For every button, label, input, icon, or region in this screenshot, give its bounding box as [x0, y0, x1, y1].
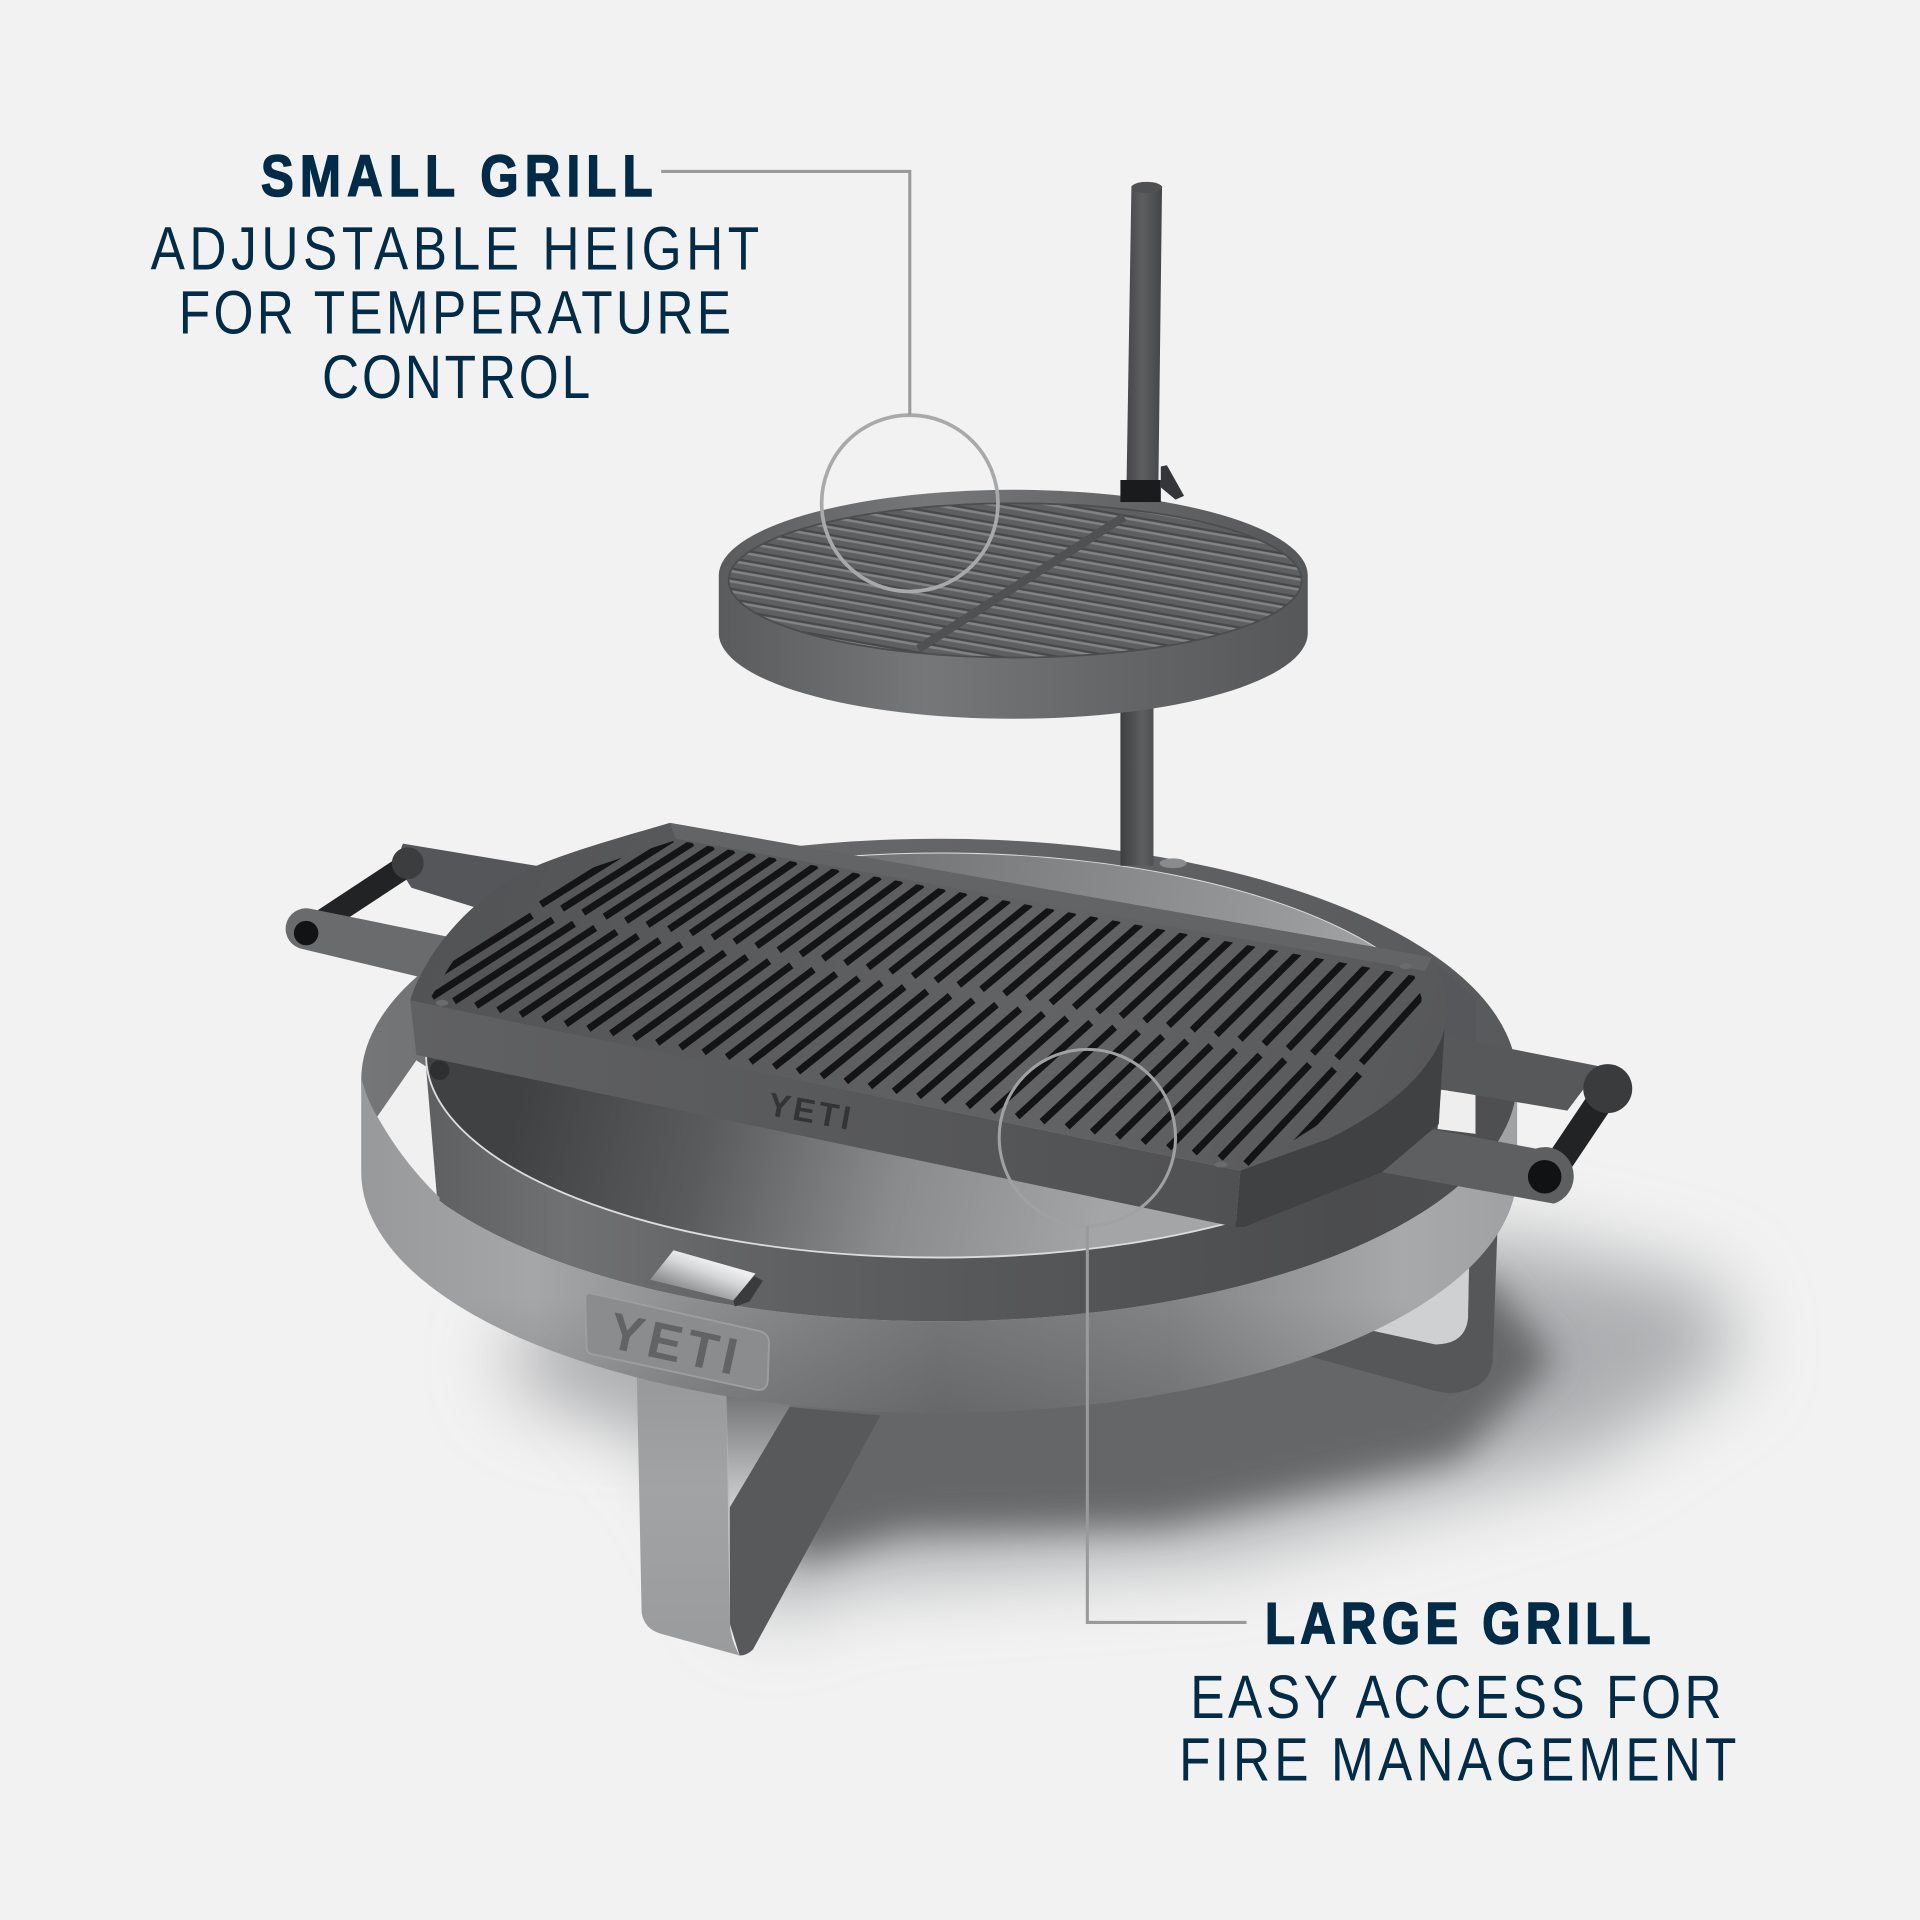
centre post upper	[1127, 182, 1184, 500]
back cap	[392, 847, 424, 879]
callout: large grill	[999, 1049, 1736, 1793]
description: FIRE MANAGEMENT	[1179, 1725, 1736, 1793]
slots	[410, 835, 1438, 1169]
grate	[729, 503, 1302, 658]
front skirt	[410, 1000, 1240, 1227]
leader line	[661, 171, 910, 415]
YETI badge	[585, 1293, 769, 1390]
right light gap	[1438, 1090, 1476, 1134]
back arm	[400, 844, 588, 931]
description: ADJUSTABLE HEIGHT	[151, 214, 759, 282]
latch	[1161, 465, 1184, 500]
leg opening	[726, 1390, 796, 1507]
rear leg	[1307, 1227, 1498, 1393]
rod cap	[1131, 182, 1162, 193]
ground shadow	[508, 1237, 1739, 1616]
handle bar	[1560, 1090, 1608, 1161]
bowl wall	[426, 1068, 1517, 1321]
outer band and rim	[719, 490, 1308, 719]
description: EASY ACCESS FOR	[1190, 1663, 1722, 1731]
right curved wall	[1236, 1022, 1445, 1227]
callout circle	[999, 1049, 1176, 1226]
cap hole	[1528, 1160, 1561, 1194]
callout circle	[822, 415, 998, 591]
bowl interior	[426, 853, 1455, 1258]
front arm	[286, 908, 490, 989]
band lower shade	[361, 1080, 1517, 1413]
bright tab	[650, 1250, 756, 1300]
back lip	[670, 823, 1432, 971]
description	[1179, 1663, 1736, 1793]
bowl back wall	[859, 854, 1374, 947]
handle bar	[321, 863, 410, 922]
cap hole	[294, 921, 318, 945]
ring back edge	[361, 839, 1517, 1321]
rear leg opening	[1368, 1237, 1469, 1344]
large grill	[410, 823, 1446, 1227]
leader line	[1087, 1226, 1247, 1622]
back row slots	[541, 835, 1438, 1063]
ring front band	[361, 1080, 1517, 1413]
collar	[1120, 480, 1161, 502]
rod	[1127, 186, 1162, 485]
back arm	[1408, 1029, 1600, 1111]
leg inner face	[730, 1407, 880, 1656]
rear leg strap	[1307, 1227, 1498, 1393]
fire ring and bowl	[361, 833, 1517, 1413]
cross rib	[918, 517, 1124, 649]
description: FOR TEMPERATURE	[179, 278, 731, 347]
grill top plate	[410, 823, 1446, 1171]
description	[151, 214, 759, 411]
front leg	[637, 1371, 880, 1656]
tab shadow	[733, 1276, 763, 1307]
post bolt	[1160, 858, 1187, 868]
description: CONTROL	[322, 343, 590, 411]
heading: SMALL GRILL	[261, 143, 653, 209]
callout: small grill	[151, 143, 998, 591]
centre post lower	[1120, 704, 1187, 868]
leg outer face	[637, 1371, 740, 1656]
right ring inner shade	[1430, 961, 1476, 1092]
badge plate	[585, 1293, 769, 1390]
badge text: YETI	[604, 1301, 743, 1386]
small grill	[719, 480, 1308, 719]
bowl side bolt	[430, 1060, 449, 1080]
left handle	[286, 844, 588, 989]
grill bolts	[436, 963, 1412, 1168]
infographic canvas	[150, 154, 1768, 1781]
front row slots	[410, 916, 1359, 1169]
ring left shoulder	[361, 1078, 440, 1224]
light gap	[377, 1060, 443, 1206]
right handle	[1380, 1029, 1632, 1204]
post	[1120, 704, 1153, 866]
back cap	[1583, 1064, 1632, 1113]
heading: LARGE GRILL	[1265, 1590, 1651, 1656]
grill brand: YETI	[765, 1086, 854, 1138]
front arm	[1380, 1119, 1574, 1204]
